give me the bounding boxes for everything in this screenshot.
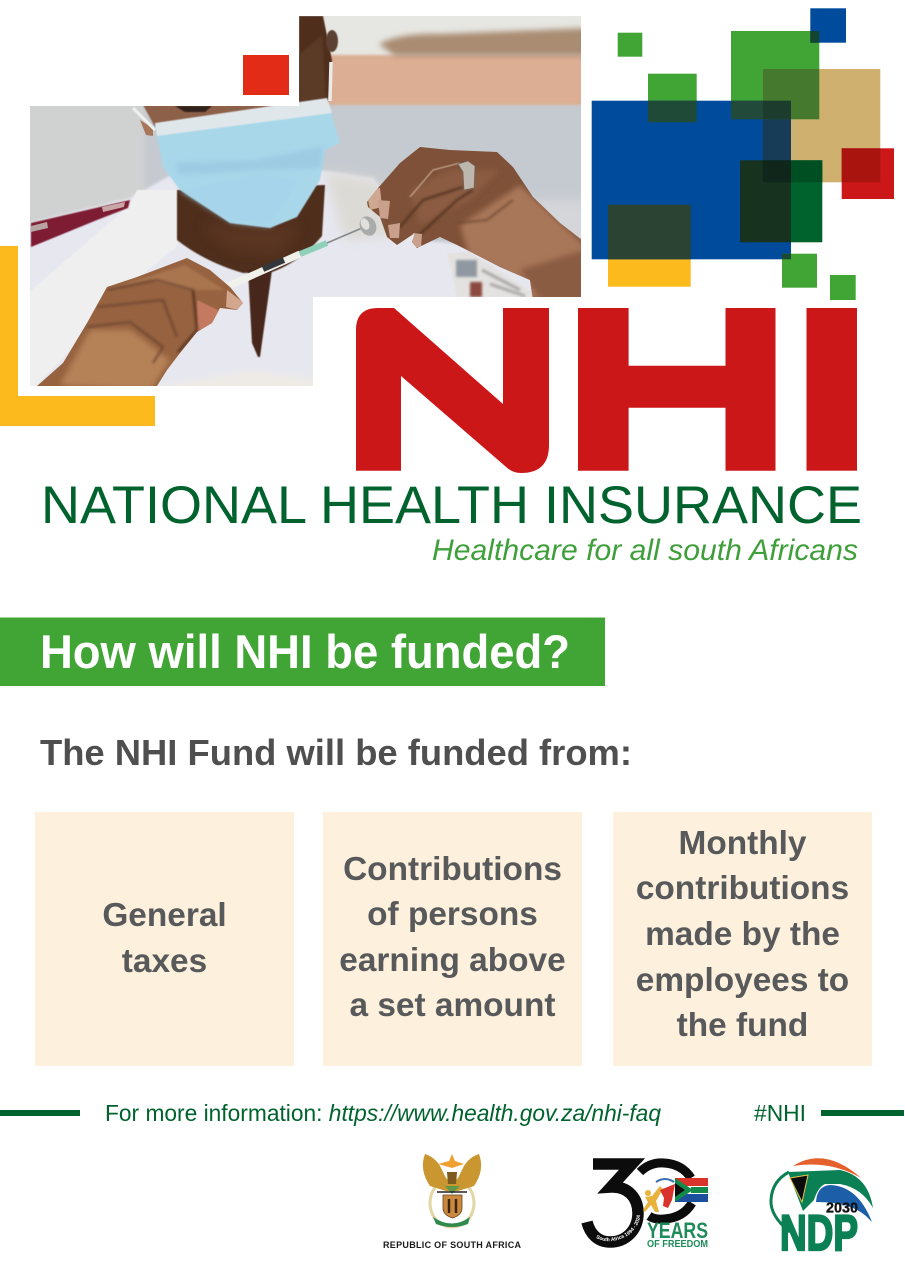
photo: health worker in mask preparing a syringe xyxy=(20,10,600,400)
panel: general taxes: taxes xyxy=(122,943,207,980)
panel: contributions of persons: Contributions xyxy=(343,851,562,888)
name badge xyxy=(447,252,540,297)
right hand xyxy=(367,147,581,297)
logo: NDP 2030 xyxy=(771,1158,873,1261)
subheading: The NHI Fund will be funded from: xyxy=(40,732,632,773)
decorative yellow corner bracket xyxy=(0,246,155,426)
panel: monthly contributions: the fund xyxy=(677,1007,808,1044)
panel: contributions of persons: a set amount xyxy=(350,987,555,1024)
title: National Health Insurance: NATIONAL HEALTH INSURANCE xyxy=(41,476,862,535)
panel: monthly contributions: made by the xyxy=(645,916,840,953)
South African flag xyxy=(675,1178,708,1202)
panel: monthly contributions xyxy=(613,812,872,1066)
logo: NDP 2030: NDP xyxy=(780,1205,858,1261)
banner heading: How will NHI be funded? xyxy=(40,625,570,678)
panel: monthly contributions: Monthly xyxy=(679,825,807,862)
panel: general taxes: General xyxy=(102,897,227,934)
colour block motif xyxy=(592,8,894,300)
footer information line: For more information: https://www.health.gov.za/nhi-faq xyxy=(105,1100,661,1126)
footer information line xyxy=(0,1100,904,1126)
footer information line: #NHI xyxy=(754,1100,806,1126)
logo: 30 years of freedom: YEARS xyxy=(647,1218,708,1243)
tagline: Healthcare for all south Africans xyxy=(432,534,858,567)
face mask xyxy=(155,98,340,228)
people figures xyxy=(643,1179,675,1212)
left hand xyxy=(37,258,243,386)
panel: monthly contributions: contributions xyxy=(636,870,849,907)
panel: monthly contributions: employees to xyxy=(636,962,849,999)
syringe and vial xyxy=(226,216,376,288)
logo: NDP 2030: 2030 xyxy=(826,1200,858,1216)
logo: 30 years of freedom xyxy=(582,1158,708,1250)
panel: general taxes xyxy=(35,812,294,1066)
NHI logo wordmark xyxy=(356,308,857,473)
logo: Republic of South Africa coat of arms xyxy=(383,1154,522,1250)
decorative red square xyxy=(243,55,289,95)
logo: Republic of South Africa coat of arms: REPUBLIC OF SOUTH AFRICA xyxy=(383,1240,522,1250)
logo: 30 years of freedom: South Africa 1994 - 2024 xyxy=(596,1215,640,1242)
panel: contributions of persons: earning above xyxy=(339,942,566,979)
panel: contributions of persons: of persons xyxy=(367,896,538,933)
logo: 30 years of freedom: OF FREEDOM xyxy=(647,1239,708,1250)
panel: contributions of persons xyxy=(323,812,582,1066)
